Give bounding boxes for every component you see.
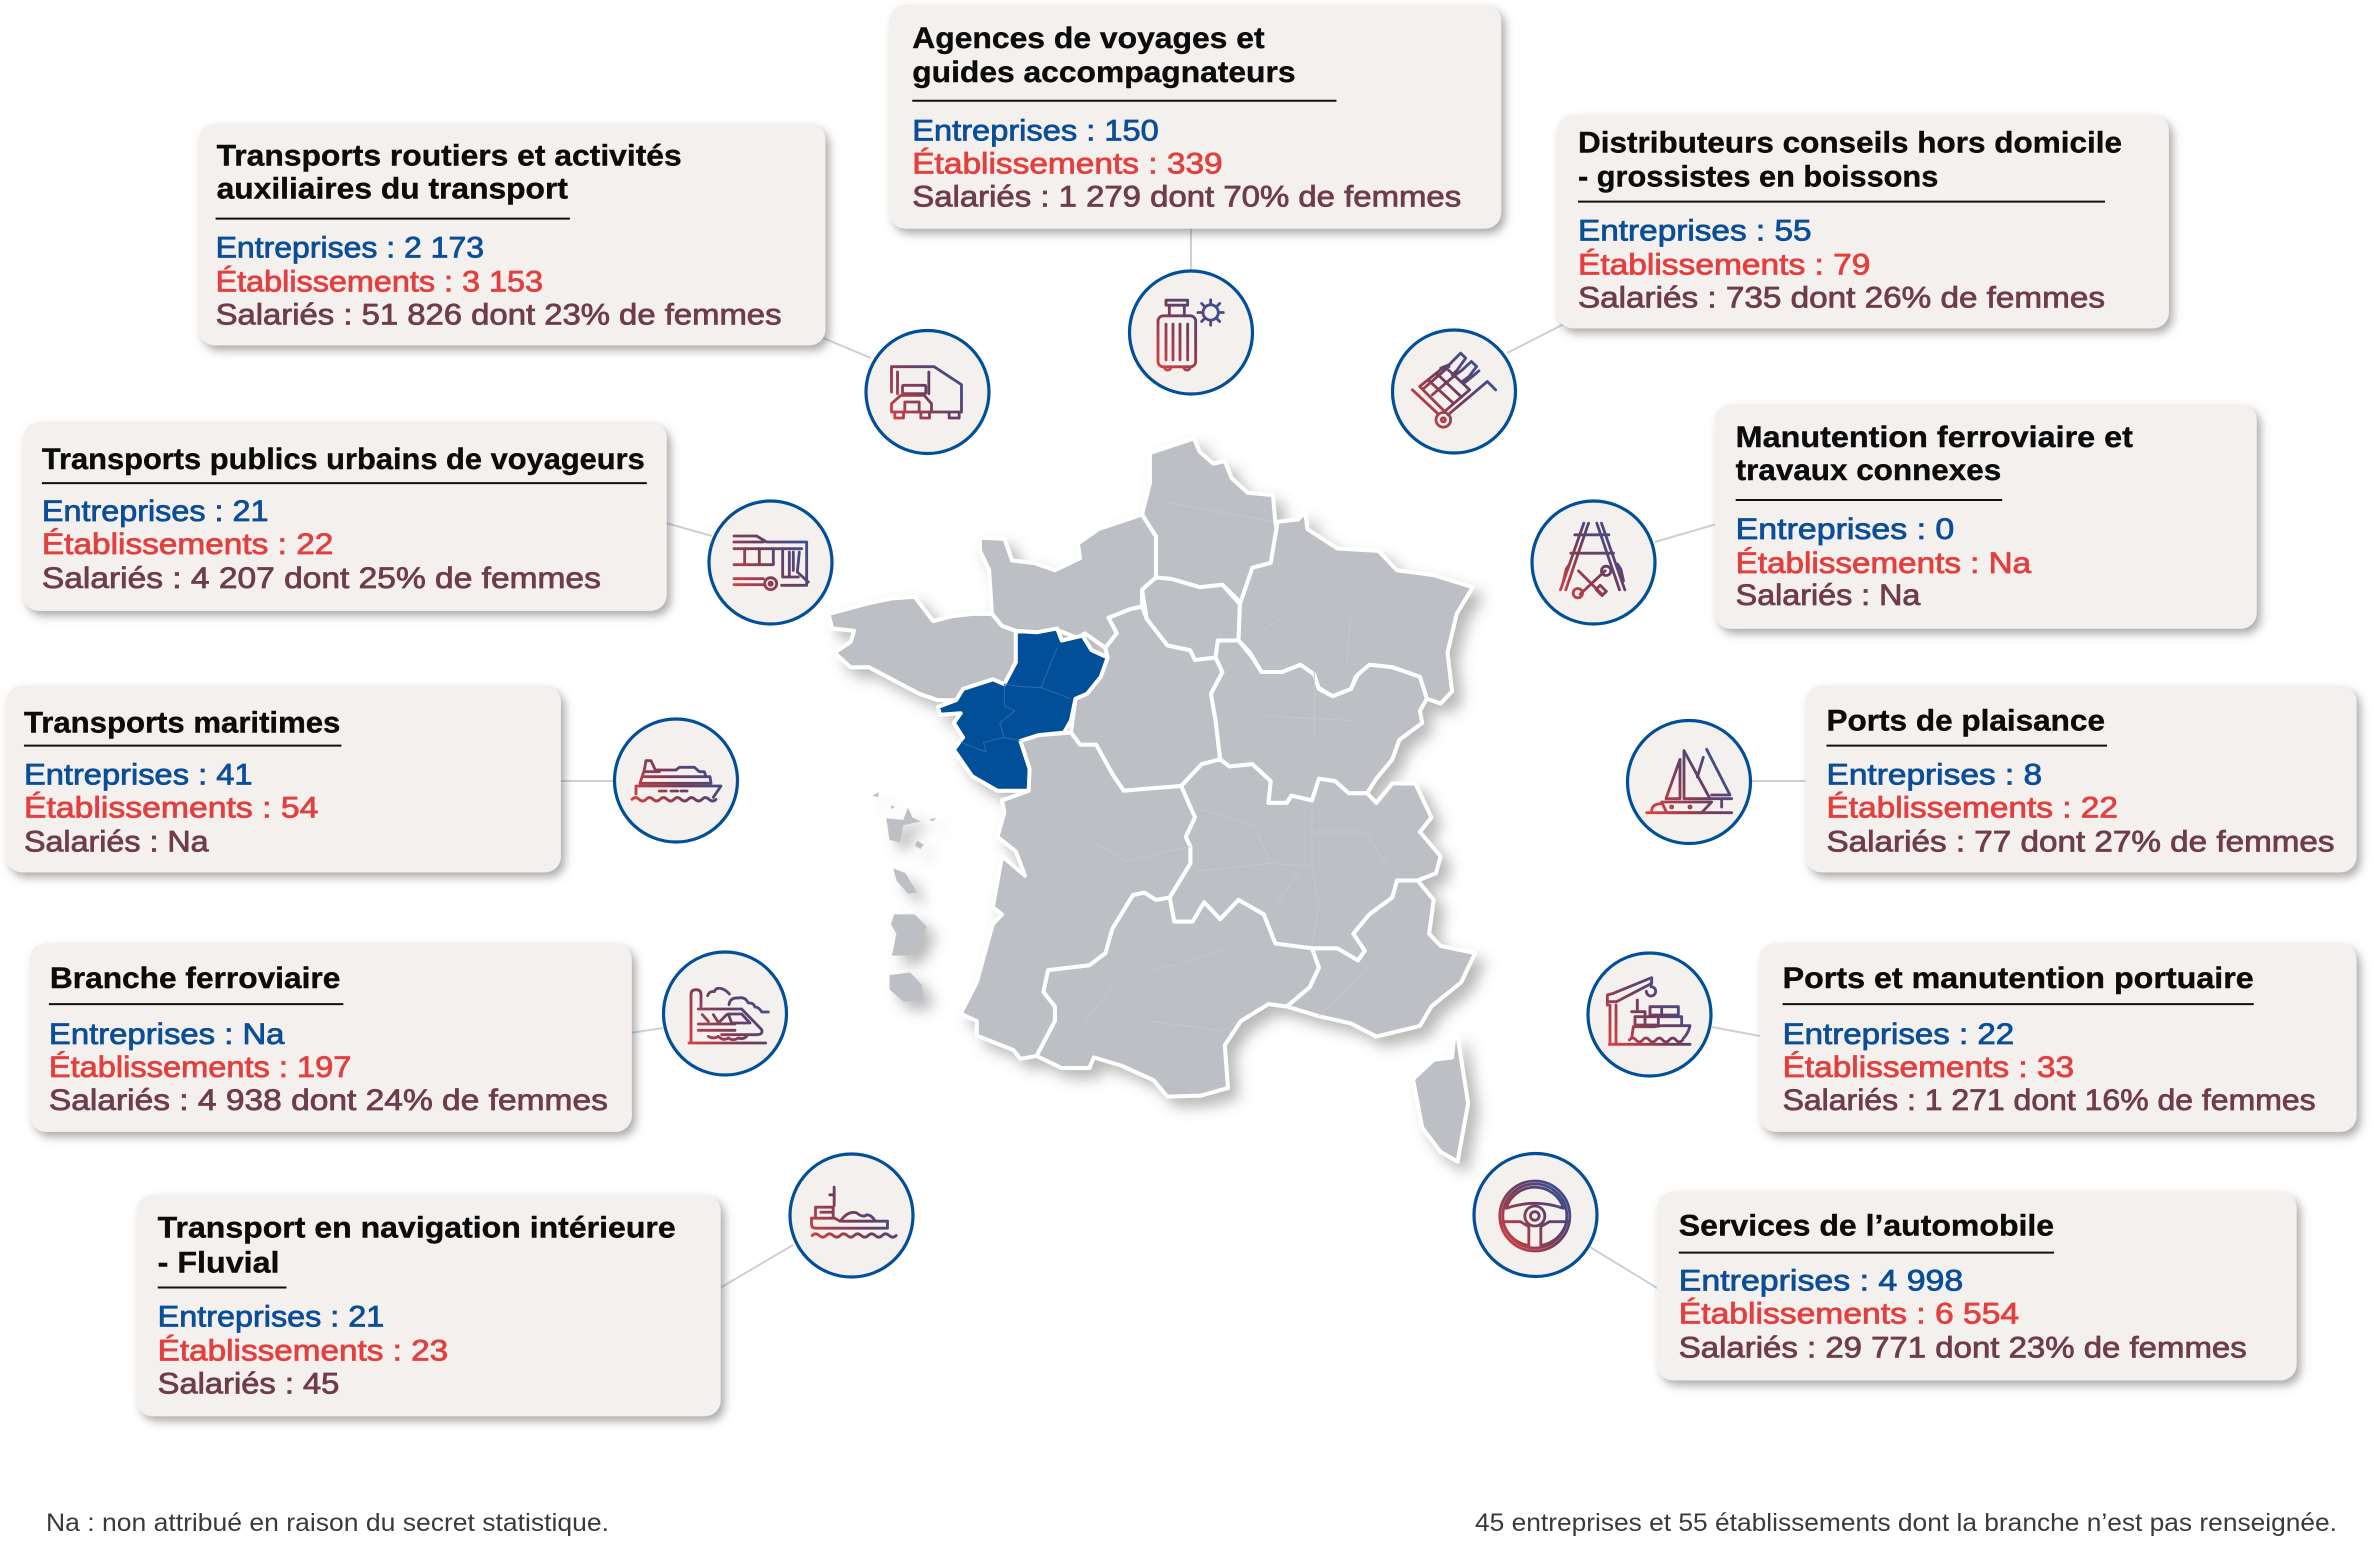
heading: Branche ferroviaire	[50, 962, 340, 995]
connector lines	[560, 225, 1811, 1291]
heading	[158, 1212, 676, 1280]
figures: Entreprises : 22	[1783, 1018, 2014, 1051]
heading: Transports routiers et activités	[217, 140, 682, 173]
icon: railway and tools	[1532, 501, 1655, 624]
heading: - grossistes en boissons	[1578, 161, 1938, 194]
figures: Entreprises : 2 173	[216, 232, 484, 265]
heading: travaux connexes	[1736, 454, 2001, 487]
figures: Établissements : Na	[1736, 547, 2032, 580]
figures	[1827, 759, 2335, 858]
figures	[912, 115, 1461, 214]
region: Provence-Alpes-Cote d'Azur	[1287, 880, 1475, 1037]
panel: Services de l'automobile	[1657, 1192, 2297, 1380]
figures: Établissements : 79	[1578, 248, 1870, 281]
heading: Agences de voyages et	[912, 22, 1265, 55]
icon: bottle cart	[1392, 330, 1516, 453]
icon: train	[664, 952, 786, 1075]
heading: Ports de plaisance	[1827, 705, 2105, 738]
figures	[158, 1300, 448, 1400]
footnote: unassigned enterprises: 45 entreprises et 55 établissements dont la branche n’est pas renseignée.	[1475, 1509, 2337, 1537]
figures: Salariés : 77 dont 27% de femmes	[1827, 825, 2335, 858]
figures	[24, 759, 318, 858]
panel: Transports routiers	[199, 124, 825, 345]
heading: Services de l’automobile	[1679, 1210, 2054, 1243]
figures: Établissements : 33	[1783, 1051, 2074, 1084]
figures: Entreprises : 8	[1827, 759, 2042, 792]
figures: Entreprises : 0	[1736, 513, 1954, 546]
heading: Transports maritimes	[24, 707, 340, 740]
region: Nouvelle-Aquitaine	[961, 733, 1195, 1059]
figures: Établissements : 339	[912, 148, 1223, 181]
region: Corse	[1413, 1036, 1468, 1162]
region: Bretagne	[828, 597, 1016, 700]
icon: bus	[709, 501, 832, 624]
heading: auxiliaires du transport	[217, 173, 568, 206]
icon: river barge	[790, 1154, 913, 1277]
panel: Distributeurs conseils	[1557, 115, 2169, 328]
heading	[217, 140, 682, 206]
region: Hauts-de-France	[1142, 438, 1278, 602]
heading: - Fluvial	[158, 1247, 279, 1280]
figures: Établissements : 6 554	[1679, 1297, 2019, 1330]
figures	[216, 232, 782, 331]
panel: Ports de plaisance	[1806, 686, 2357, 872]
panel: Transports publics urbains	[23, 422, 667, 611]
figures	[1783, 1018, 2316, 1117]
footnote: Na definition: Na : non attribué en raison du secret statistique.	[46, 1509, 609, 1537]
figures: Salariés : Na	[24, 825, 209, 858]
figures: Entreprises : 21	[42, 495, 268, 528]
heading	[1578, 127, 2122, 194]
heading: Ports et manutention portuaire	[1783, 962, 2254, 995]
figures: Entreprises : 21	[158, 1300, 384, 1333]
figures: Établissements : 22	[42, 528, 333, 561]
figures: Entreprises : 41	[24, 759, 253, 792]
region: Grand Est	[1239, 512, 1473, 704]
heading: guides accompagnateurs	[912, 56, 1296, 89]
panel: Branche ferroviaire	[30, 943, 632, 1132]
region: Auvergne-Rhone-Alpes	[1170, 759, 1441, 960]
figures	[1679, 1265, 2247, 1364]
figures: Salariés : 4 207 dont 25% de femmes	[42, 562, 601, 595]
heading: Distributeurs conseils hors domicile	[1578, 127, 2122, 160]
figures: Entreprises : 55	[1578, 215, 1812, 248]
icon: truck	[866, 330, 989, 454]
map of France	[828, 438, 1475, 1162]
panel: Agences de voyages	[889, 5, 1501, 229]
figures: Établissements : 54	[24, 791, 318, 824]
panel: Transport fluvial	[137, 1195, 721, 1416]
figures: Salariés : 29 771 dont 23% de femmes	[1679, 1331, 2247, 1364]
figures: Entreprises : 150	[912, 115, 1159, 148]
region: Pays de la Loire (highlighted)	[938, 628, 1108, 791]
panel: Ports et manutention portuaire	[1760, 943, 2357, 1132]
figures	[42, 495, 601, 595]
figures: Établissements : 197	[49, 1051, 351, 1084]
figures: Salariés : 735 dont 26% de femmes	[1578, 281, 2105, 314]
figures: Entreprises : Na	[49, 1018, 285, 1051]
figures: Établissements : 3 153	[216, 265, 543, 298]
icon: steering wheel	[1474, 1154, 1597, 1276]
heading: Manutention ferroviaire et	[1736, 421, 2133, 454]
figures: Salariés : 1 271 dont 16% de femmes	[1783, 1084, 2316, 1117]
figures	[1736, 513, 2032, 612]
icon: luggage and sun	[1130, 271, 1252, 394]
figures: Entreprises : 4 998	[1679, 1265, 1963, 1298]
figures: Salariés : 1 279 dont 70% de femmes	[912, 181, 1461, 214]
figures: Établissements : 22	[1827, 791, 2118, 824]
heading	[1736, 421, 2133, 487]
region: Centre-Val de Loire	[1071, 607, 1222, 791]
figures: Salariés : 51 826 dont 23% de femmes	[216, 298, 782, 331]
figures	[1578, 215, 2105, 314]
panel: Transports maritimes	[6, 686, 561, 872]
heading: Transports publics urbains de voyageurs	[42, 443, 645, 476]
panel: Manutention ferroviaire	[1715, 404, 2257, 629]
overseas territories	[872, 792, 936, 1002]
icon: cruise ship	[614, 719, 738, 842]
region: Normandie	[980, 515, 1156, 648]
figures: Salariés : 4 938 dont 24% de femmes	[49, 1084, 608, 1117]
figures: Établissements : 23	[158, 1334, 448, 1367]
figures	[49, 1018, 608, 1117]
heading: Transport en navigation intérieure	[158, 1212, 676, 1245]
icon: sailboats	[1628, 720, 1750, 844]
region: Occitanie	[1036, 893, 1319, 1097]
region: Bourgogne-Franche-Comte	[1211, 641, 1427, 803]
figures: Salariés : Na	[1736, 579, 1921, 612]
department borders	[961, 502, 1388, 1031]
icon: crane and container ship	[1588, 953, 1711, 1076]
heading	[912, 22, 1296, 89]
figures: Salariés : 45	[158, 1367, 339, 1400]
region: Ile-de-France	[1142, 578, 1240, 660]
